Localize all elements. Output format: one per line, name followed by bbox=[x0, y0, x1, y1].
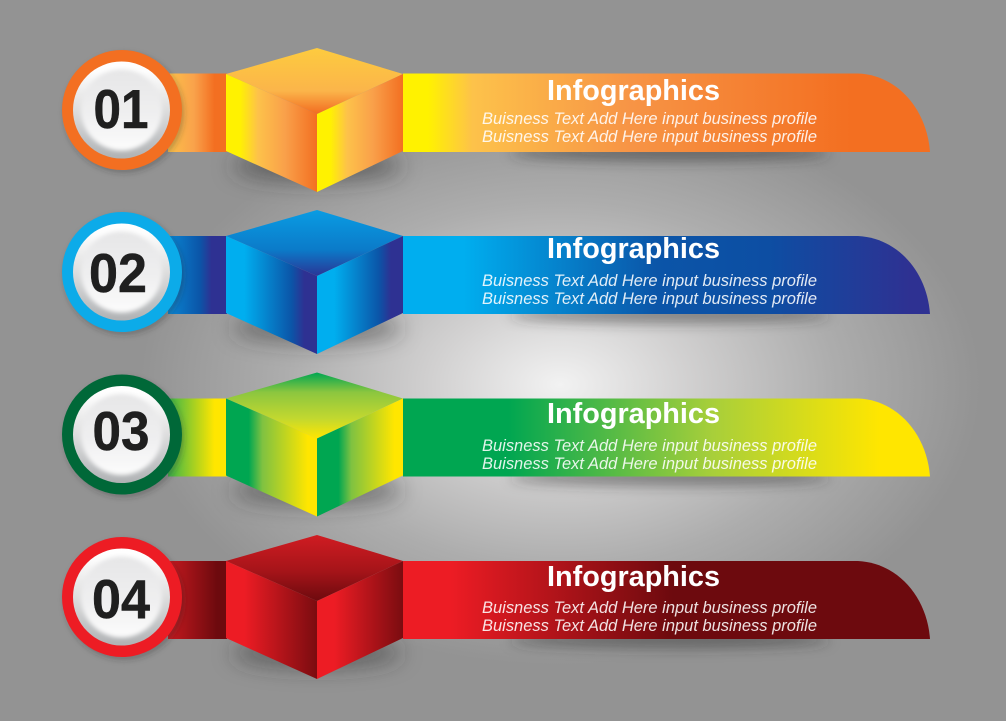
number badge bbox=[62, 537, 184, 660]
row 1: orange bbox=[62, 48, 930, 192]
right band bbox=[403, 74, 930, 152]
text block: Buisness Text Add Here input business profile bbox=[482, 128, 817, 146]
text block: Buisness Text Add Here input business profile bbox=[482, 110, 817, 128]
cube bbox=[226, 210, 403, 354]
drop shadows bbox=[232, 145, 830, 181]
left band bbox=[168, 398, 227, 476]
right band bbox=[403, 236, 930, 314]
row 4: red bbox=[62, 535, 930, 679]
number badge bbox=[62, 374, 184, 498]
text block bbox=[482, 561, 817, 635]
cube bbox=[226, 535, 403, 679]
text block bbox=[482, 398, 817, 473]
text block: Buisness Text Add Here input business profile bbox=[482, 599, 817, 617]
row 3: green bbox=[62, 372, 930, 516]
left band bbox=[168, 236, 227, 314]
text block: Infographics bbox=[547, 561, 720, 593]
text block: Infographics bbox=[547, 75, 720, 107]
right band bbox=[403, 561, 930, 639]
number badge bbox=[62, 50, 184, 173]
left band bbox=[168, 74, 227, 152]
text block: Infographics bbox=[547, 398, 720, 430]
text block: Buisness Text Add Here input business profile bbox=[482, 290, 817, 308]
number badge bbox=[62, 212, 184, 335]
text block: Buisness Text Add Here input business profile bbox=[482, 437, 817, 455]
number badge: 03 bbox=[92, 400, 150, 462]
text block: Buisness Text Add Here input business profile bbox=[482, 455, 817, 473]
drop shadows bbox=[232, 307, 830, 343]
text block bbox=[482, 75, 817, 146]
drop shadows bbox=[232, 470, 830, 506]
number badge: 01 bbox=[94, 78, 148, 140]
text block: Buisness Text Add Here input business profile bbox=[482, 272, 817, 290]
right band bbox=[403, 398, 930, 476]
row 2: blue bbox=[62, 210, 930, 354]
text block: Buisness Text Add Here input business profile bbox=[482, 617, 817, 635]
text block bbox=[482, 233, 817, 308]
number badge: 02 bbox=[89, 242, 147, 304]
drop shadows bbox=[232, 632, 830, 668]
number badge: 04 bbox=[92, 568, 150, 630]
cube bbox=[226, 48, 403, 192]
left band bbox=[168, 561, 227, 639]
text block: Infographics bbox=[547, 233, 720, 265]
cube bbox=[226, 372, 403, 516]
